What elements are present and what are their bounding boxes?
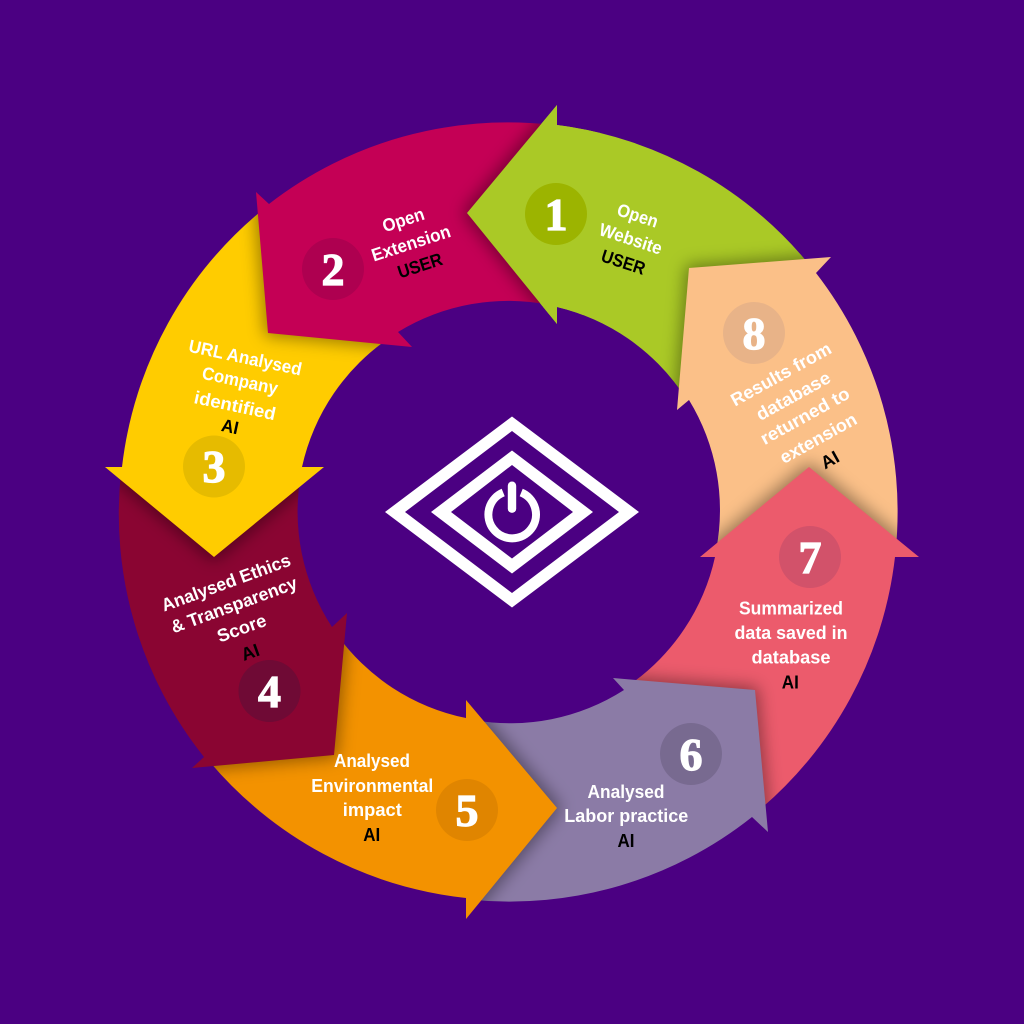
step 1 content [525,183,665,279]
number badge 4: 4 [258,666,281,717]
step 3 content [183,336,304,498]
number badge 2 [302,238,364,300]
step 6 label: AI [618,831,634,851]
number badge 4 [238,660,300,722]
step 4 label: Analysed Ethics [159,550,293,615]
step 2 content [302,204,453,300]
step 7 label: AI [782,672,799,692]
step 7 label: database [752,648,830,668]
arrow 3: yellow [105,208,391,557]
arrow 8: peach [677,257,898,552]
step 3 label: Company [200,363,280,398]
number badge 2: 2 [322,244,344,295]
step 1 label: USER [599,246,648,279]
step 5 label: impact [343,800,402,820]
step 5 label: Environmental [311,776,433,796]
step 6 content [564,723,722,851]
step 4 label: AI [238,640,262,665]
step 8 label: extension [776,409,860,468]
number badge 7: 7 [798,532,822,583]
step 7 label: data saved in [734,623,848,643]
arrow 6: grey violet [471,678,768,902]
step 4 label: & Transparency [168,573,300,637]
step 8 label [727,338,860,473]
step 2 label: Extension [369,221,453,265]
number badge 5: 5 [456,785,478,836]
step 8 label: Results from [727,338,835,410]
step 7 label: Summarized [739,598,843,618]
step 2 label: USER [395,249,445,282]
arrow 1 head: green overlapping crimson [457,105,600,324]
step 5 label: Analysed [334,751,410,771]
step 6 label: Analysed [588,782,664,802]
number badge 5 [436,779,498,841]
step 6 label: Labor practice [564,806,688,826]
step 2 label: Open [380,204,427,236]
number badge 7 [779,526,841,588]
arrow 7: coral [630,467,919,813]
step 8 content [723,302,860,473]
step 5 content [311,751,498,845]
number badge 3 [183,436,245,498]
arrow 2: crimson [256,122,552,347]
step 5 label: AI [363,825,380,845]
step 1 label: Website [597,219,665,259]
number badge 1: 1 [544,189,568,240]
step 1 label: Open [615,200,661,232]
step 8 label: database [753,367,834,425]
number badge 3: 3 [202,441,226,492]
step 7 content [734,526,848,692]
step 4 label [159,550,300,665]
step 4 content [159,550,300,722]
step 5 label [311,751,433,845]
step 3 label: identified [192,387,278,424]
step 8 label: AI [817,447,843,473]
step 1 label [597,200,665,279]
step 6 label [564,782,688,851]
step 2 label [369,204,453,282]
step 3 label: URL Analysed [187,336,304,379]
arrow 1 body: green [467,105,812,394]
step 7 label [734,598,848,692]
step 8 label: returned to [757,383,853,449]
arrow 4: dark red [119,471,347,768]
number badge 8 [723,302,785,364]
step 4 label: Score [214,610,269,646]
number badge 6: 6 [680,729,702,780]
step 3 label: AI [220,415,240,438]
number badge 6 [660,723,722,785]
step 3 label [187,336,304,438]
number badge 8: 8 [742,308,766,359]
center logo: nested diamonds with power icon [385,416,639,608]
arrow 5: orange [207,633,557,919]
